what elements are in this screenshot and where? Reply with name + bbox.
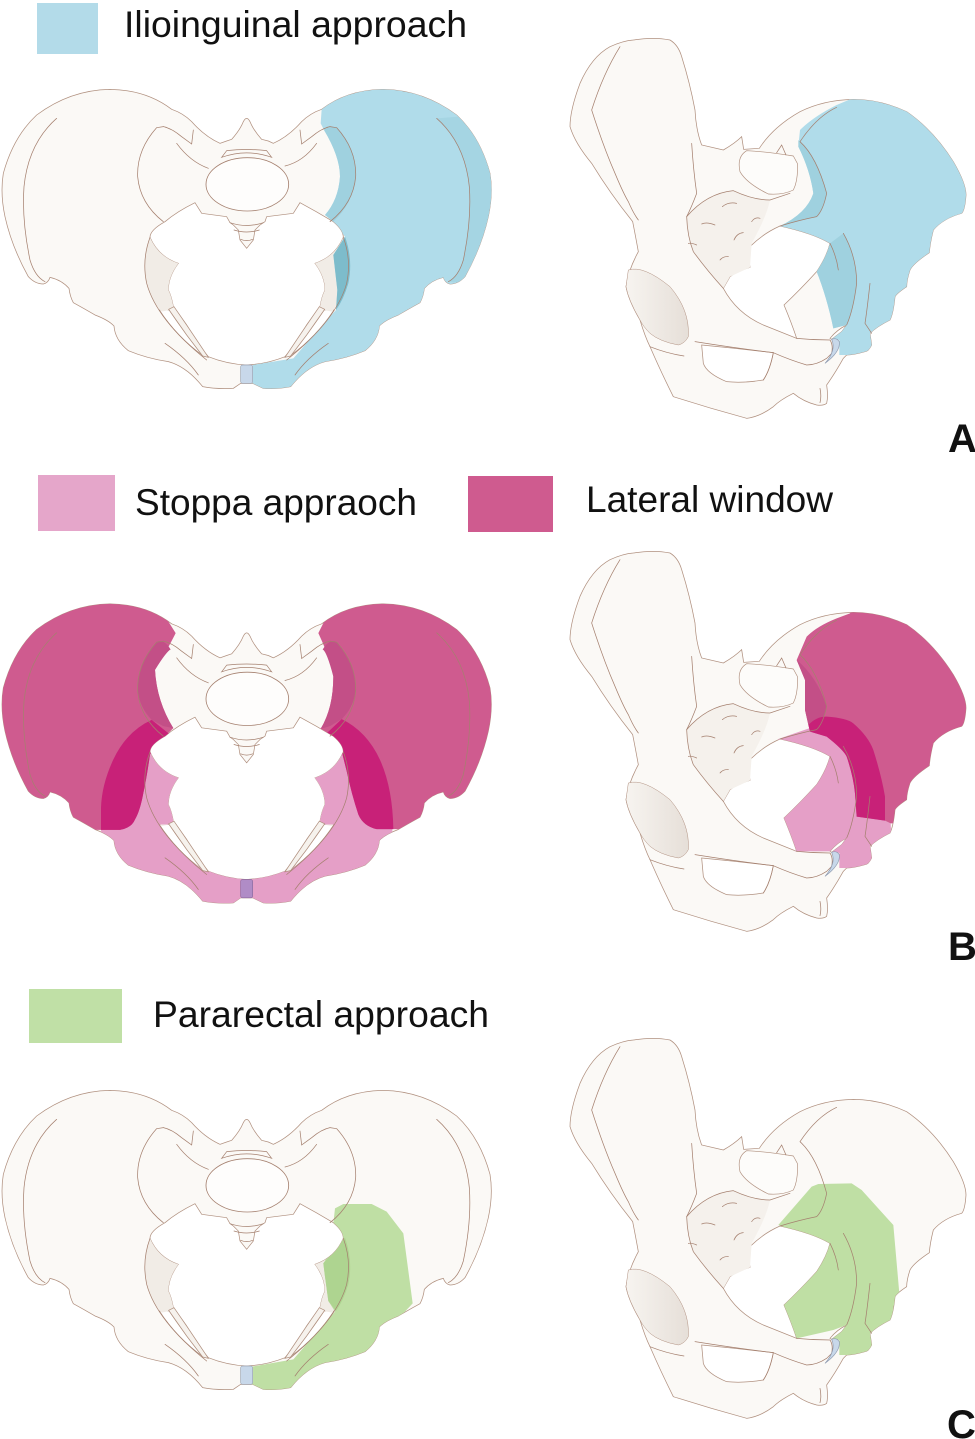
pubic symphysis (241, 879, 253, 898)
vertebra (206, 158, 289, 211)
legend swatch: pararectal approach (29, 989, 122, 1043)
vertebra (206, 1159, 289, 1212)
legend swatch: lateral window (468, 476, 553, 532)
legend label: lateral window: Lateral window (586, 479, 833, 520)
panel B front view: pelvis with Stoppa and lateral window regions (2, 604, 492, 904)
pubic symphysis (825, 1339, 839, 1363)
legend label: Stoppa approach: Stoppa appraoch (135, 482, 417, 523)
legend swatch: Stoppa approach (38, 475, 115, 531)
blue ilioinguinal region (780, 93, 975, 363)
panel C side view: pelvis with pararectal approach (570, 1038, 966, 1418)
panel C front view: pelvis with pararectal approach (2, 1090, 491, 1401)
vertebra (206, 672, 289, 725)
pubic symphysis (241, 365, 253, 383)
panel A front view: pelvis with ilioinguinal approach (2, 80, 500, 393)
blue ilioinguinal region (253, 80, 500, 393)
pink Stoppa and lateral window regions (778, 612, 966, 868)
panel A side view: pelvis with ilioinguinal approach (570, 38, 975, 418)
panel B side view: pelvis with Stoppa and lateral window regions (570, 551, 975, 931)
legend swatch: ilioinguinal approach (37, 3, 98, 54)
pubic symphysis (825, 339, 839, 363)
green pararectal region (252, 1204, 413, 1390)
legend label: pararectal approach: Pararectal approach (153, 994, 489, 1035)
green pararectal region (778, 1183, 899, 1363)
pubic symphysis (825, 852, 839, 876)
legend label: ilioinguinal approach: Ilioinguinal approach (124, 4, 467, 45)
pink Stoppa and lateral window regions (2, 604, 492, 904)
pubic symphysis (241, 1366, 253, 1384)
